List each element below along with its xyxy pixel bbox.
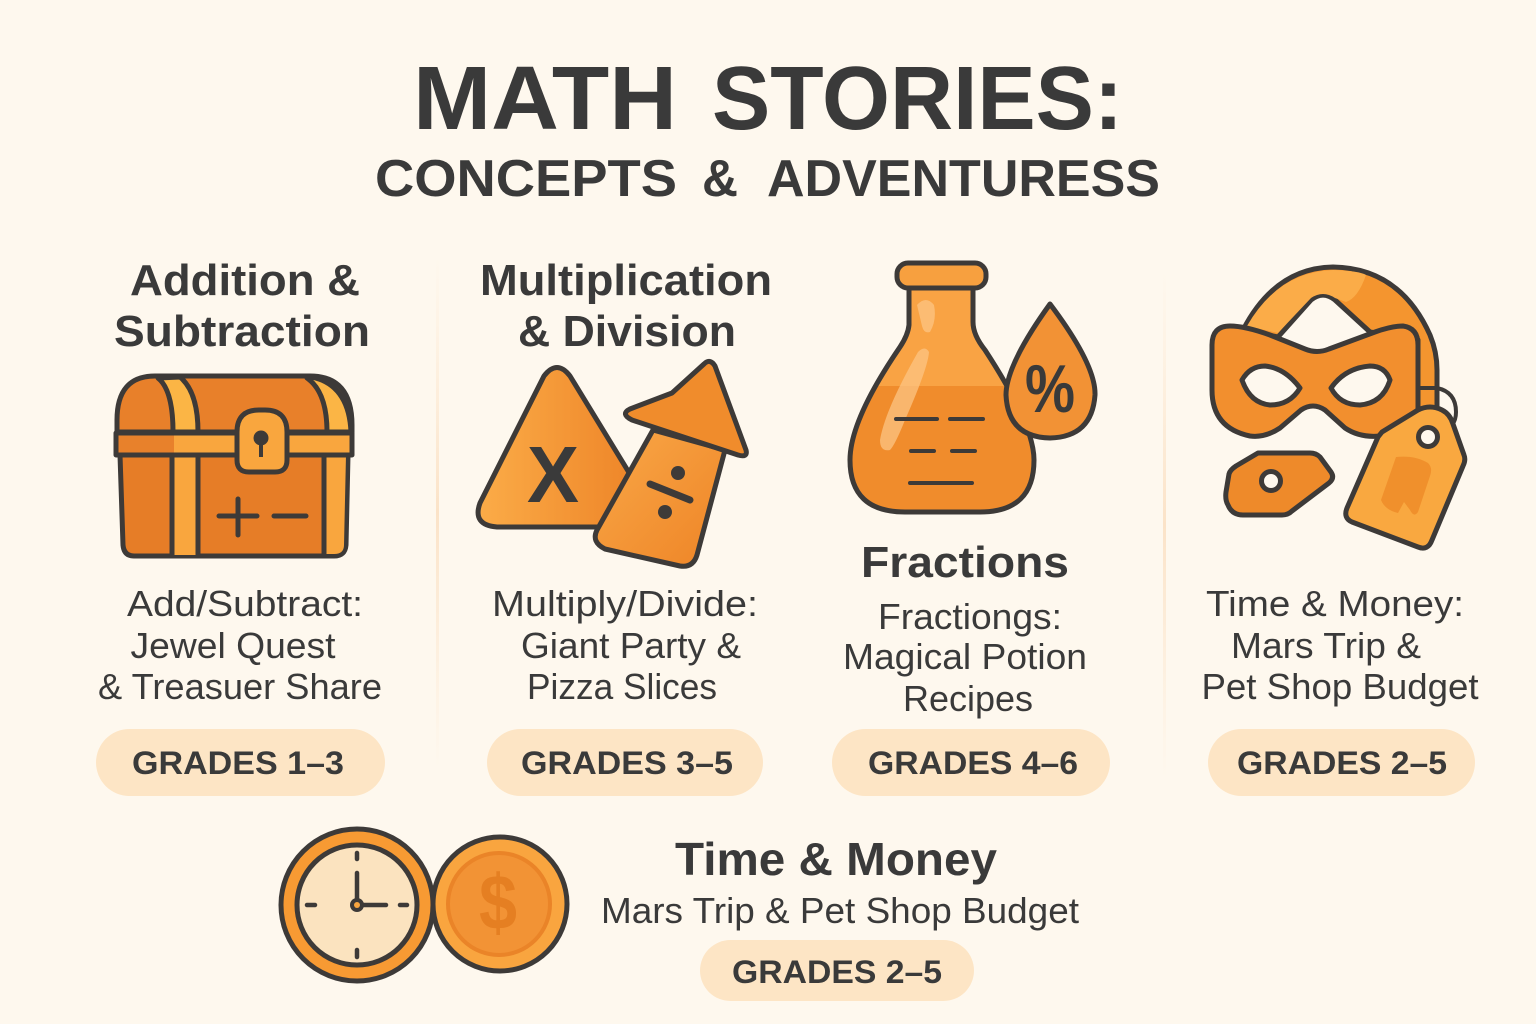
heading: multiplication and division (480, 256, 772, 356)
icon: coin: $ (479, 858, 517, 946)
description: Fractiongs: (878, 596, 1062, 637)
description: Pet Shop Budget (1202, 666, 1478, 707)
grade pill (1208, 729, 1475, 796)
grade pill: GRADES 3–5 (521, 745, 733, 781)
panel: time and money mask (1202, 267, 1478, 796)
heading: addition and subtraction: Addition & (130, 256, 360, 305)
grade pill: GRADES 2–5 (1237, 745, 1447, 781)
description (1202, 583, 1478, 707)
grade pill (832, 729, 1110, 796)
description: Jewel Quest (130, 625, 336, 666)
title: CONCEPTS (375, 150, 677, 208)
icon: treasure chest (116, 376, 352, 556)
title: & (702, 150, 738, 208)
panel: multiplication and division (478, 256, 772, 796)
heading: fractions: Fractions (861, 538, 1069, 587)
title (375, 49, 1160, 208)
heading: multiplication and division: Multiplication (480, 256, 772, 305)
description: Multiply/Divide: (492, 583, 758, 624)
description: Mars Trip & Pet Shop Budget (601, 890, 1079, 931)
description (492, 583, 758, 707)
icon: mask and price tags (1212, 267, 1465, 548)
grade pill (487, 729, 763, 796)
heading: Time & Money (675, 833, 997, 885)
icon: multiply and divide shapes: X (527, 430, 579, 519)
heading: addition and subtraction: Subtraction (114, 307, 370, 356)
title: STORIES: (712, 49, 1123, 149)
grade pill: GRADES 2–5 (732, 954, 942, 990)
icon: potion flask: % (1025, 351, 1075, 427)
panel: time and money bottom (281, 829, 1079, 1001)
heading: multiplication and division: & Division (518, 307, 736, 356)
description: & Treasuer Share (98, 666, 382, 707)
description (98, 583, 382, 707)
title: MATH (413, 49, 677, 149)
description: Giant Party & (521, 625, 741, 666)
heading: addition and subtraction (114, 256, 370, 356)
icon: potion flask (845, 263, 1095, 516)
description (843, 596, 1087, 719)
description: Recipes (903, 678, 1033, 719)
description: Time & Money: (1206, 583, 1464, 624)
grade pill: GRADES 4–6 (868, 745, 1078, 781)
description: Mars Trip & (1231, 625, 1421, 666)
title: ADVENTURESS (767, 150, 1160, 208)
icon: multiply and divide shapes (478, 361, 746, 566)
icon: coin (433, 837, 567, 971)
grade pill (700, 940, 974, 1001)
grade pill (96, 729, 385, 796)
panel: fractions (832, 263, 1110, 796)
description: Add/Subtract: (127, 583, 363, 624)
description: Pizza Slices (527, 666, 717, 707)
panel: addition and subtraction (96, 256, 385, 796)
description: Magical Potion (843, 636, 1087, 677)
icon: clock (281, 829, 433, 981)
grade pill: GRADES 1–3 (132, 745, 344, 781)
